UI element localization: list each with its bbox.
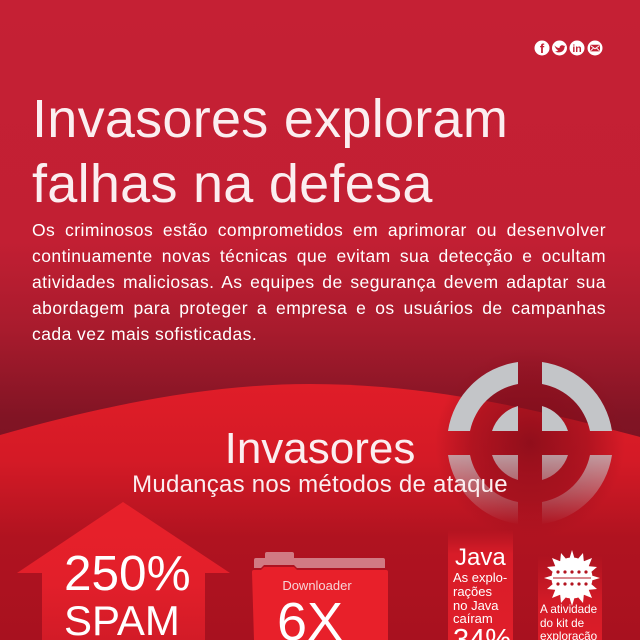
- text: java drop: [453, 570, 507, 626]
- icon: virus: [544, 550, 600, 606]
- section subheading: Mudanças nos métodos de ataque: [132, 471, 508, 498]
- icon: facebook: f: [540, 41, 545, 56]
- heading: java: Java: [455, 544, 506, 571]
- panel: java: [448, 530, 513, 640]
- text: java drop: caíram: [453, 611, 493, 626]
- text: exploit kit: A atividade: [540, 603, 597, 616]
- icon: twitter: [552, 40, 567, 56]
- intro paragraph: cada vez mais sofisticadas.: [32, 324, 257, 344]
- text: java drop: no Java: [453, 598, 499, 613]
- icon: linkedin: in: [572, 43, 582, 55]
- intro paragraph: continuamente novas técnicas que evitam sua detecção e ocultam: [32, 246, 606, 266]
- icon: mail: [588, 40, 602, 56]
- label: downloader: Downloader: [282, 578, 352, 593]
- text: java drop: rações: [453, 584, 492, 599]
- intro paragraph: Os criminosos estão comprometidos em aprimorar ou desenvolver: [32, 220, 606, 240]
- text: exploit kit: do kit de: [540, 616, 584, 630]
- folder: downloader: [252, 552, 388, 640]
- intro paragraph: abordagem para proteger a empresa e os usuários de campanhas: [32, 298, 606, 318]
- social icons: [534, 40, 602, 56]
- panel: exploit kit: [538, 556, 602, 640]
- stat: 250%: 250%: [64, 546, 191, 601]
- intro paragraph: [32, 220, 606, 344]
- title: falhas na defesa: [32, 154, 433, 214]
- title: Invasores exploram: [32, 89, 508, 149]
- text: java drop: As explo-: [453, 570, 507, 585]
- section heading: Invasores: [225, 424, 415, 473]
- text: exploit kit: [540, 603, 597, 640]
- title: [32, 89, 508, 214]
- intro paragraph: atividades maliciosas. As equipes de segurança devem adaptar sua: [32, 272, 606, 292]
